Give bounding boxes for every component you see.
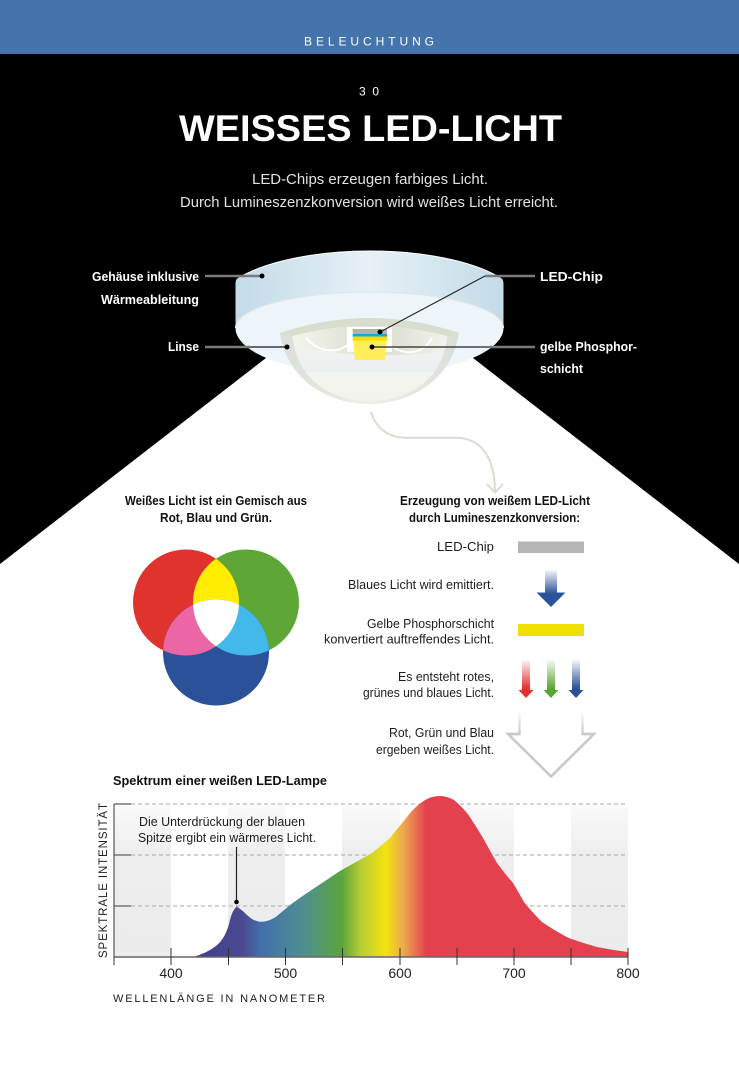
x axis numbers: 400: [159, 965, 183, 981]
wavelength bands: [114, 804, 628, 957]
callout: suppressed blue peak: Die Unterdrückung der blauen: [139, 814, 305, 829]
x axis numbers: 500: [274, 965, 297, 981]
RGB colour mixing circles: [133, 550, 299, 706]
label: LED chip: [378, 270, 603, 334]
black background with light cone: [0, 54, 739, 564]
step: white light: Rot, Grün und Blau: [389, 725, 494, 740]
label: LED chip: LED-Chip: [540, 270, 603, 284]
step: LED chip: [437, 539, 584, 554]
step: LED chip: LED-Chip: [437, 539, 494, 554]
x axis numbers: 600: [388, 965, 412, 981]
label: phosphor layer: gelbe Phosphor-: [540, 340, 637, 354]
x axis numbers: 800: [616, 965, 640, 981]
heading: luminescence conversion: durch Lumineszenzkonversion:: [409, 511, 580, 525]
subtitle: LED-Chips erzeugen farbiges Licht.: [252, 171, 488, 188]
step: yellow phosphor layer: konvertiert auftreffendes Licht.: [324, 632, 494, 646]
subtitle: Durch Lumineszenzkonversion wird weißes Licht erreicht.: [180, 194, 558, 211]
label: lens: Linse: [168, 340, 199, 354]
header band: BELEUCHTUNG: [304, 34, 434, 48]
grid lines: [131, 804, 628, 906]
LED lamp cross-section: [236, 251, 504, 404]
step: blue light emitted: [348, 570, 566, 607]
label: lens: [168, 340, 290, 354]
spectrum chart: [98, 796, 640, 1005]
callout: suppressed blue peak: Spitze ergibt ein wärmeres Licht.: [138, 830, 316, 845]
LED chip with phosphor layer: [347, 327, 392, 360]
curved arrow: [371, 412, 503, 492]
subtitle: [180, 171, 558, 211]
heading: white light mixture: [125, 494, 307, 525]
x axis numbers: 700: [502, 965, 526, 981]
heading: white light mixture: Rot, Blau und Grün.: [160, 511, 272, 525]
title: WEISSES LED-LICHT: [179, 108, 562, 149]
heading: luminescence conversion: Erzeugung von weißem LED-Licht: [400, 494, 591, 508]
label: housing: [92, 270, 264, 307]
lens: [280, 318, 459, 404]
heading: luminescence conversion: [400, 494, 591, 525]
axes and ticks: [114, 804, 628, 965]
step: white light: ergeben weißes Licht.: [376, 742, 494, 757]
header band: [0, 0, 739, 54]
chart title: Spektrum einer weißen LED-Lampe: [113, 774, 327, 788]
callout: suppressed blue peak: [138, 814, 316, 904]
housing: [236, 251, 504, 375]
spectrum curve: [193, 796, 628, 957]
label: phosphor layer: [370, 340, 637, 376]
x axis numbers: [159, 965, 640, 981]
page number: 30: [359, 84, 379, 98]
step: yellow phosphor layer: [324, 616, 584, 646]
label: housing: Wärmeableitung: [101, 293, 199, 307]
x axis label: WELLENLÄNGE IN NANOMETER: [113, 993, 325, 1005]
step: blue light emitted: Blaues Licht wird emittiert.: [348, 577, 494, 592]
label: housing: Gehäuse inklusive: [92, 270, 199, 284]
step: yellow phosphor layer: Gelbe Phosphorschicht: [367, 616, 494, 631]
label: phosphor layer: schicht: [540, 362, 584, 376]
step: red green blue light: grünes und blaues Licht.: [363, 685, 494, 700]
step: red green blue light: Es entsteht rotes,: [398, 669, 494, 684]
step: white light: [376, 712, 594, 776]
step: red green blue light: [363, 660, 584, 700]
heading: white light mixture: Weißes Licht ist ein Gemisch aus: [125, 494, 307, 508]
y axis label: SPEKTRALE INTENSITÄT: [98, 803, 110, 958]
